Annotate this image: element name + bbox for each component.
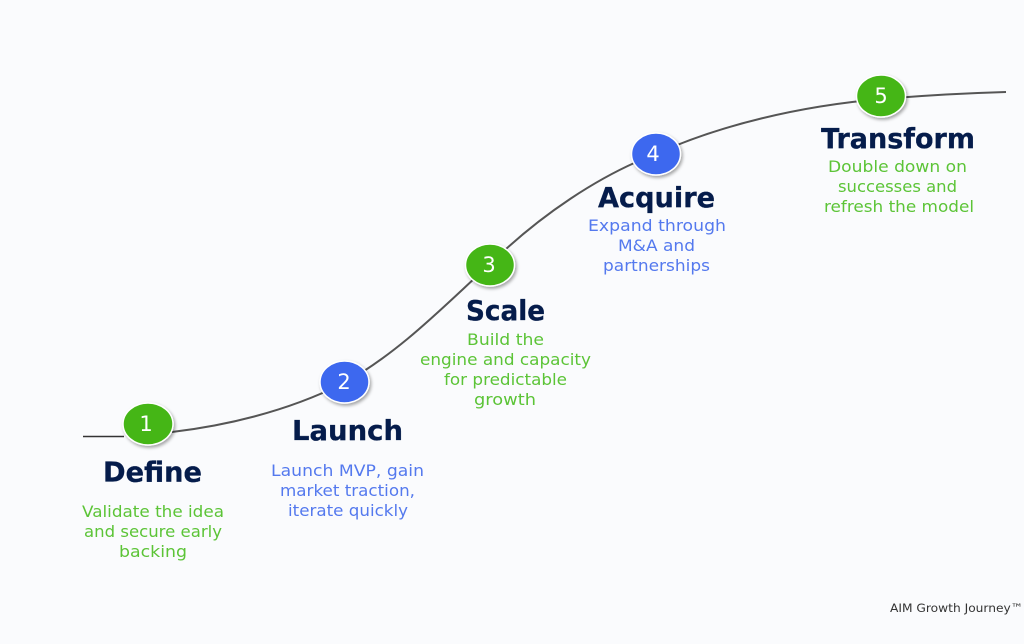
description: Define: backing [119, 542, 187, 561]
description: Scale: Build the [467, 330, 544, 349]
description: Acquire: partnerships [603, 256, 710, 275]
description: Define: Validate the idea [82, 502, 224, 521]
description: Acquire [588, 216, 726, 275]
marker 2: 2 [337, 370, 351, 394]
description: Launch: market traction, [280, 481, 415, 500]
step 3: Scale [420, 244, 591, 409]
marker 4: 4 [646, 142, 660, 166]
marker 1 [123, 403, 173, 445]
description: Acquire: M&A and [618, 236, 695, 255]
marker 2 [320, 361, 369, 403]
heading: Define: Define [103, 456, 202, 488]
description: Launch [271, 461, 424, 520]
marker 5 [856, 75, 906, 117]
step 4: Acquire [588, 133, 726, 275]
description: Scale: growth [474, 390, 536, 409]
description: Scale: for predictable [444, 370, 567, 389]
description: Scale: engine and capacity [420, 350, 591, 369]
description: Transform: Double down on [828, 157, 967, 176]
description: Transform: successes and [838, 177, 957, 196]
description: Launch: iterate quickly [288, 501, 408, 520]
heading: Acquire: Acquire [598, 181, 715, 214]
description: Define: and secure early [84, 522, 222, 541]
heading: Transform: Transform [821, 122, 975, 155]
description: Transform [824, 157, 974, 216]
heading: Launch: Launch [292, 414, 403, 447]
marker 3 [466, 244, 514, 286]
marker 4 [632, 133, 680, 175]
step 1: Define [82, 403, 224, 561]
marker 3: 3 [482, 253, 496, 277]
marker 5: 5 [874, 84, 888, 108]
step 5: Transform [821, 75, 975, 216]
footer label: AIM Growth Journey™ [890, 601, 1023, 615]
marker 1: 1 [139, 412, 153, 436]
heading: Scale: Scale [466, 294, 545, 327]
description: Scale [420, 330, 591, 409]
step 2: Launch [271, 361, 424, 520]
growth curve [83, 92, 1006, 436]
description: Define [82, 502, 224, 561]
description: Launch: Launch MVP, gain [271, 461, 424, 480]
description: Acquire: Expand through [588, 216, 726, 235]
description: Transform: refresh the model [824, 197, 974, 216]
